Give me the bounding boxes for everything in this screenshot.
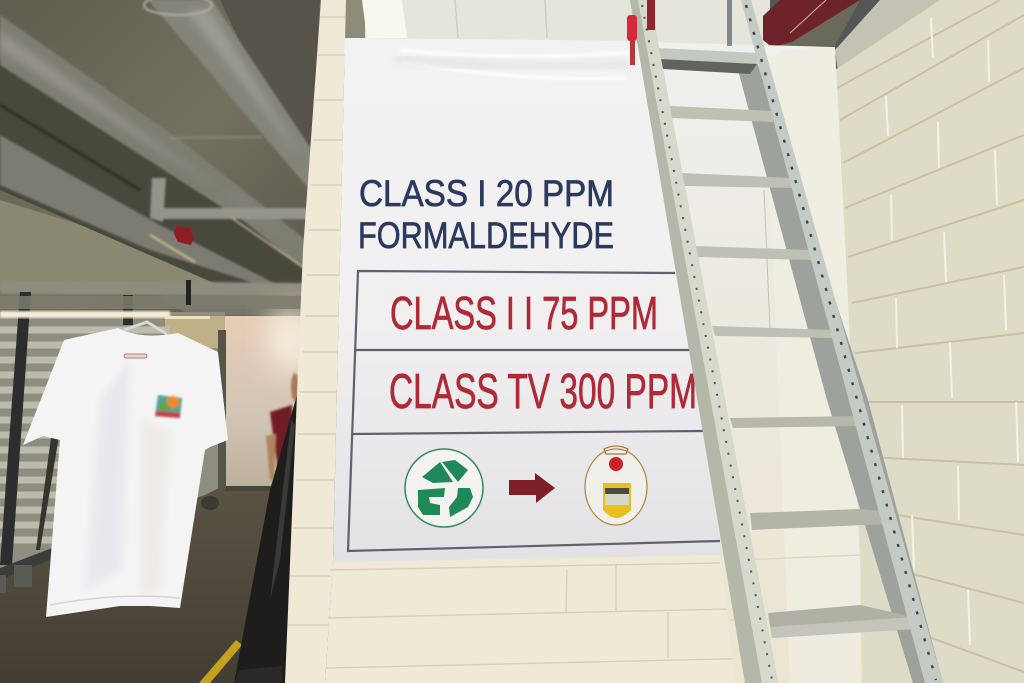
t-shirt on hanger [23,322,228,617]
right part of banner behind ladder [650,42,860,683]
heading: class I: FORMALDEHYDE [358,215,614,256]
ceiling with pipes [0,0,330,320]
shirt logo [155,395,182,418]
maroon steel beam [763,0,860,47]
top wall above banner [340,0,945,72]
icon: recycling symbol [405,449,483,527]
left brick pillar [285,0,346,683]
right ladder rail [741,0,943,683]
lower block wall below banner [325,548,862,683]
shirt neck label [124,354,147,358]
red clamp [627,15,637,65]
heading: class I [358,173,614,256]
ladder back stringer [738,62,943,683]
banner [333,38,722,562]
icon: red fire alarm [174,226,194,245]
yellow floor line [199,640,242,683]
row: class II: CLASS I I 75 PPM [390,287,658,339]
back room wall [160,308,312,491]
icon: badge with yellow shield [585,446,647,525]
left ladder rail [630,0,778,683]
heading: class I: CLASS I 20 PPM [359,173,614,214]
rolling shutter rack [0,280,305,593]
right block wall [835,0,1024,683]
floor [0,486,307,683]
row: class IV: CLASS TV 300 PPM [389,365,697,419]
steps [657,48,914,638]
person in red shirt [266,373,299,480]
ladder [627,0,943,683]
black handrail [234,395,297,683]
table frame lines [348,271,720,551]
arrow [509,473,555,503]
